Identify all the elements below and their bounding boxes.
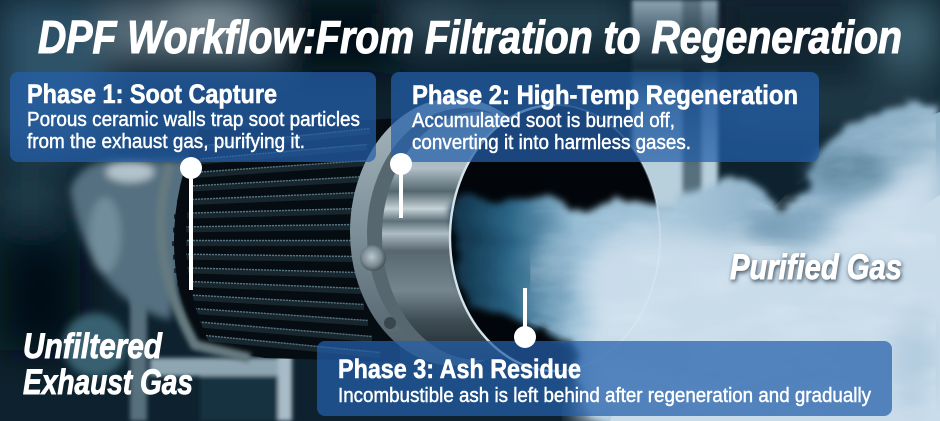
text: phase 2 description: converting it into harmless gases. xyxy=(412,132,691,154)
pipe opening xyxy=(450,105,660,371)
label: purified gas: Purified Gas xyxy=(730,248,902,287)
flange bolt xyxy=(360,245,386,271)
panel: phase 2 regeneration xyxy=(391,72,819,162)
background columns xyxy=(632,0,718,210)
text: phase 1 description: from the exhaust gas, purifying it. xyxy=(27,131,305,153)
smoke wisps xyxy=(530,108,936,415)
text: phase 2 description: Accumulated soot is burned off, xyxy=(412,110,675,132)
smoke right edge xyxy=(885,112,940,245)
filter element xyxy=(172,118,400,362)
heading: phase 3: Phase 3: Ash Residue xyxy=(338,354,581,384)
support frame xyxy=(130,250,292,421)
callout pin: phase 3 xyxy=(514,288,536,348)
pale smoke solid xyxy=(610,195,940,421)
opening rim xyxy=(450,105,660,371)
smoke body xyxy=(456,100,940,421)
text: phase 2 description xyxy=(412,110,691,154)
label: unfiltered exhaust gas xyxy=(23,327,193,402)
pale smoke soft xyxy=(580,155,940,421)
inlet pipe xyxy=(70,160,200,320)
panel: phase 3 ash residue xyxy=(317,341,892,416)
purified gas smoke xyxy=(456,100,940,421)
panel: phase 1 soot capture xyxy=(10,72,376,162)
heading: phase 1: Phase 1: Soot Capture xyxy=(27,79,277,109)
text: phase 3 description: Incombustible ash is left behind after regeneration and gradually xyxy=(338,385,871,407)
text: phase 1 description xyxy=(27,109,360,153)
text: phase 1 description: Porous ceramic walls trap soot particles xyxy=(27,109,360,131)
filter clamp xyxy=(161,165,250,358)
metal flange xyxy=(350,98,574,366)
callout pin: phase 1 xyxy=(180,157,202,290)
callout pin: phase 2 xyxy=(390,153,412,218)
label: unfiltered exhaust gas: Unfiltered xyxy=(23,327,163,366)
label: unfiltered exhaust gas: Exhaust Gas xyxy=(23,363,193,402)
heading: phase 2: Phase 2: High-Temp Regeneration xyxy=(412,80,798,110)
